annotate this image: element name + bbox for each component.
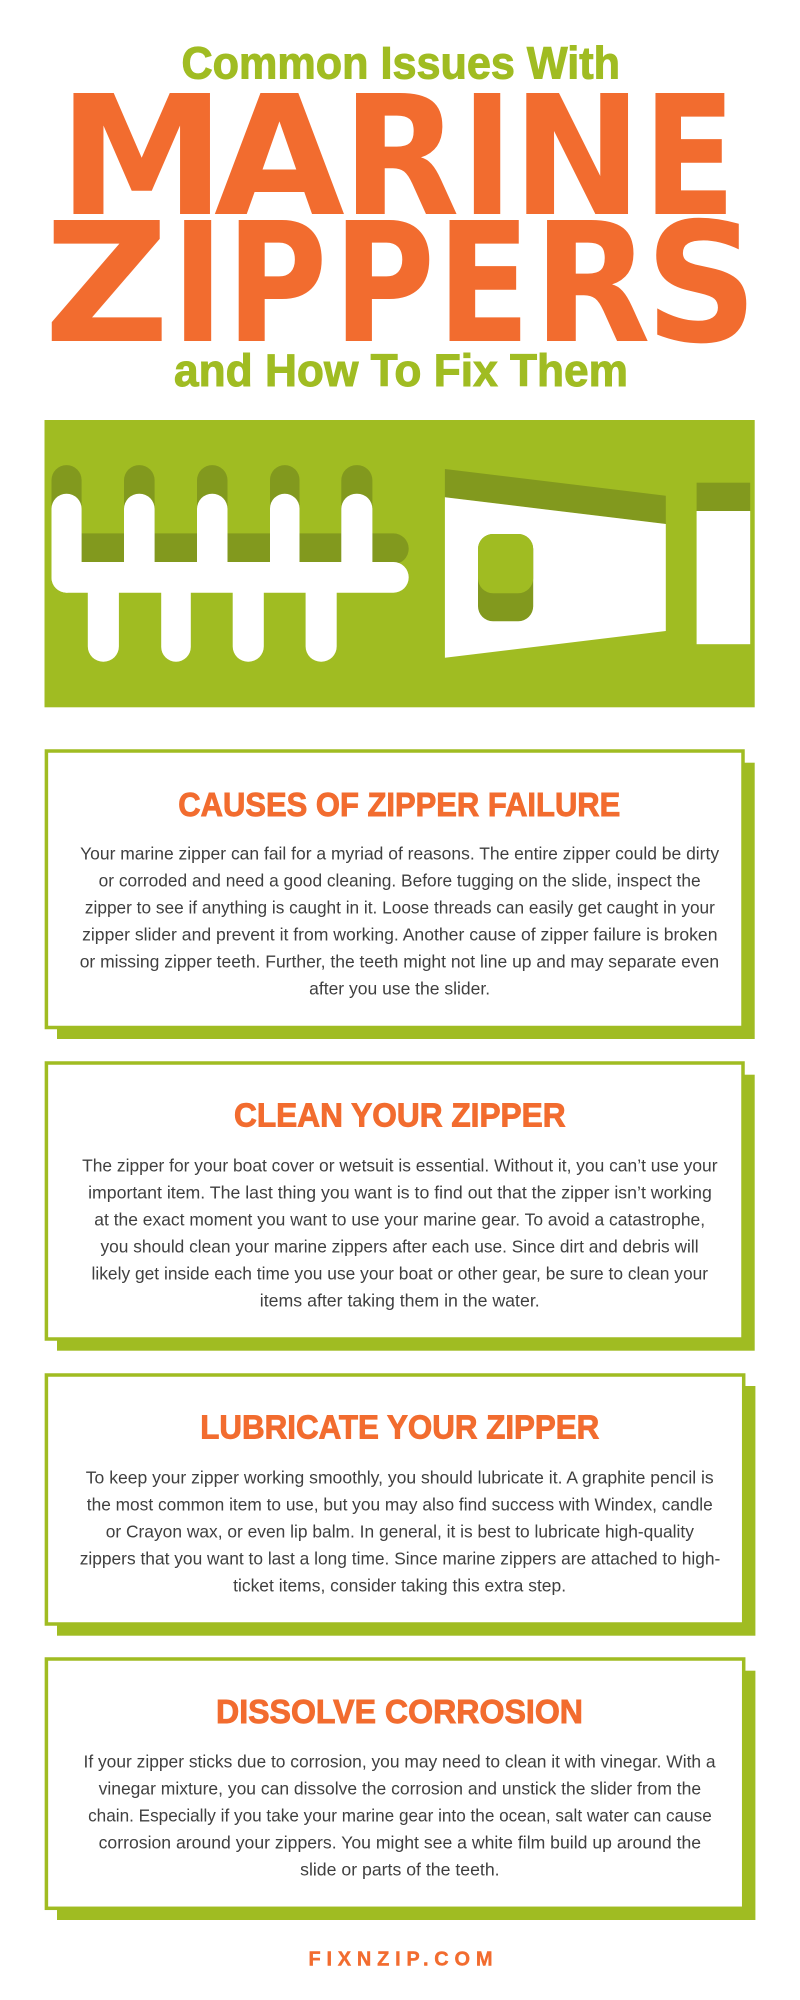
heading: CLEAN YOUR ZIPPER — [234, 1097, 566, 1134]
body text — [82, 1155, 718, 1310]
title word: marine — [58, 61, 735, 254]
text: P — [333, 188, 435, 380]
heading: CAUSES OF ZIPPER FAILURE — [178, 786, 620, 823]
body text: zippers that you want to last a long time. Since marine zippers are attached to high- — [80, 1548, 720, 1568]
body text: zipper slider and prevent it from working. Another cause of zipper failure is broken — [82, 924, 718, 944]
body text: after you use the slider. — [309, 978, 490, 998]
body text: important item. The last thing you want is to find out that the zipper isn’t working — [88, 1182, 712, 1202]
body text: items after taking them in the water. — [260, 1290, 540, 1310]
body text: the most common item to use, but you may also find success with Windex, candle — [87, 1494, 713, 1514]
heading: DISSOLVE CORROSION — [216, 1693, 583, 1730]
title word: zippers — [44, 188, 758, 380]
footer: website: FIXNZIP.COM — [308, 1949, 492, 1971]
body text: slide or parts of the teeth. — [300, 1860, 500, 1880]
zipper slider — [445, 469, 666, 658]
text: I — [171, 188, 225, 380]
text: I — [461, 61, 513, 254]
body text: you should clean your marine zippers after each use. Since dirt and debris will — [101, 1236, 699, 1256]
text: E — [437, 188, 531, 380]
body text: ticket items, consider taking this extra step. — [233, 1575, 566, 1595]
zipper pull tab — [697, 483, 750, 644]
panel: lubricate your zipper — [46, 1375, 755, 1636]
text: P — [226, 188, 327, 380]
text: A — [214, 61, 345, 254]
heading: LUBRICATE YOUR ZIPPER — [200, 1409, 599, 1446]
body text: To keep your zipper working smoothly, you should lubricate it. A graphite pencil is — [86, 1467, 714, 1487]
text: R — [533, 188, 651, 380]
text: E — [642, 61, 735, 254]
text: N — [512, 61, 642, 254]
panel: dissolve corrosion — [46, 1659, 755, 1920]
body text: or Crayon wax, or even lip balm. In general, it is best to lubricate high-quality — [106, 1521, 694, 1541]
body text — [80, 1467, 720, 1595]
body text — [80, 843, 719, 998]
text: M — [58, 61, 226, 254]
illustration: zipper banner — [44, 420, 755, 707]
panel: causes of zipper failure — [46, 751, 755, 1039]
body text: The zipper for your boat cover or wetsuit is essential. Without it, you can’t use your — [82, 1155, 718, 1175]
body text: corrosion around your zippers. You might see a white film build up around the — [99, 1833, 701, 1853]
text: Z — [44, 188, 169, 380]
text: R — [342, 61, 460, 254]
body text: zipper to see if anything is caught in it. Loose threads can easily get caught in your — [85, 897, 715, 917]
subtitle: common issues with: Common Issues With — [182, 37, 620, 88]
subtitle: and how to fix them: and How To Fix Them — [174, 345, 628, 396]
zipper teeth shadow — [52, 465, 409, 565]
body text: chain. Especially if you take your marine gear into the ocean, salt water can cause — [88, 1806, 712, 1826]
body text: likely get inside each time you use your boat or other gear, be sure to clean your — [92, 1263, 708, 1283]
body text: or corroded and need a good cleaning. Before tugging on the slide, inspect the — [99, 870, 701, 890]
panel: clean your zipper — [46, 1063, 755, 1351]
zipper teeth — [52, 494, 409, 662]
text: S — [645, 188, 758, 380]
body text — [84, 1752, 716, 1880]
body text: vinegar mixture, you can dissolve the corrosion and unstick the slider from the — [99, 1779, 701, 1799]
body text: Your marine zipper can fail for a myriad of reasons. The entire zipper could be dirty — [80, 843, 719, 863]
body text: If your zipper sticks due to corrosion, you may need to clean it with vinegar. With a — [84, 1752, 716, 1772]
body text: or missing zipper teeth. Further, the teeth might not line up and may separate even — [80, 951, 719, 971]
body text: at the exact moment you want to use your marine gear. To avoid a catastrophe, — [94, 1209, 705, 1229]
